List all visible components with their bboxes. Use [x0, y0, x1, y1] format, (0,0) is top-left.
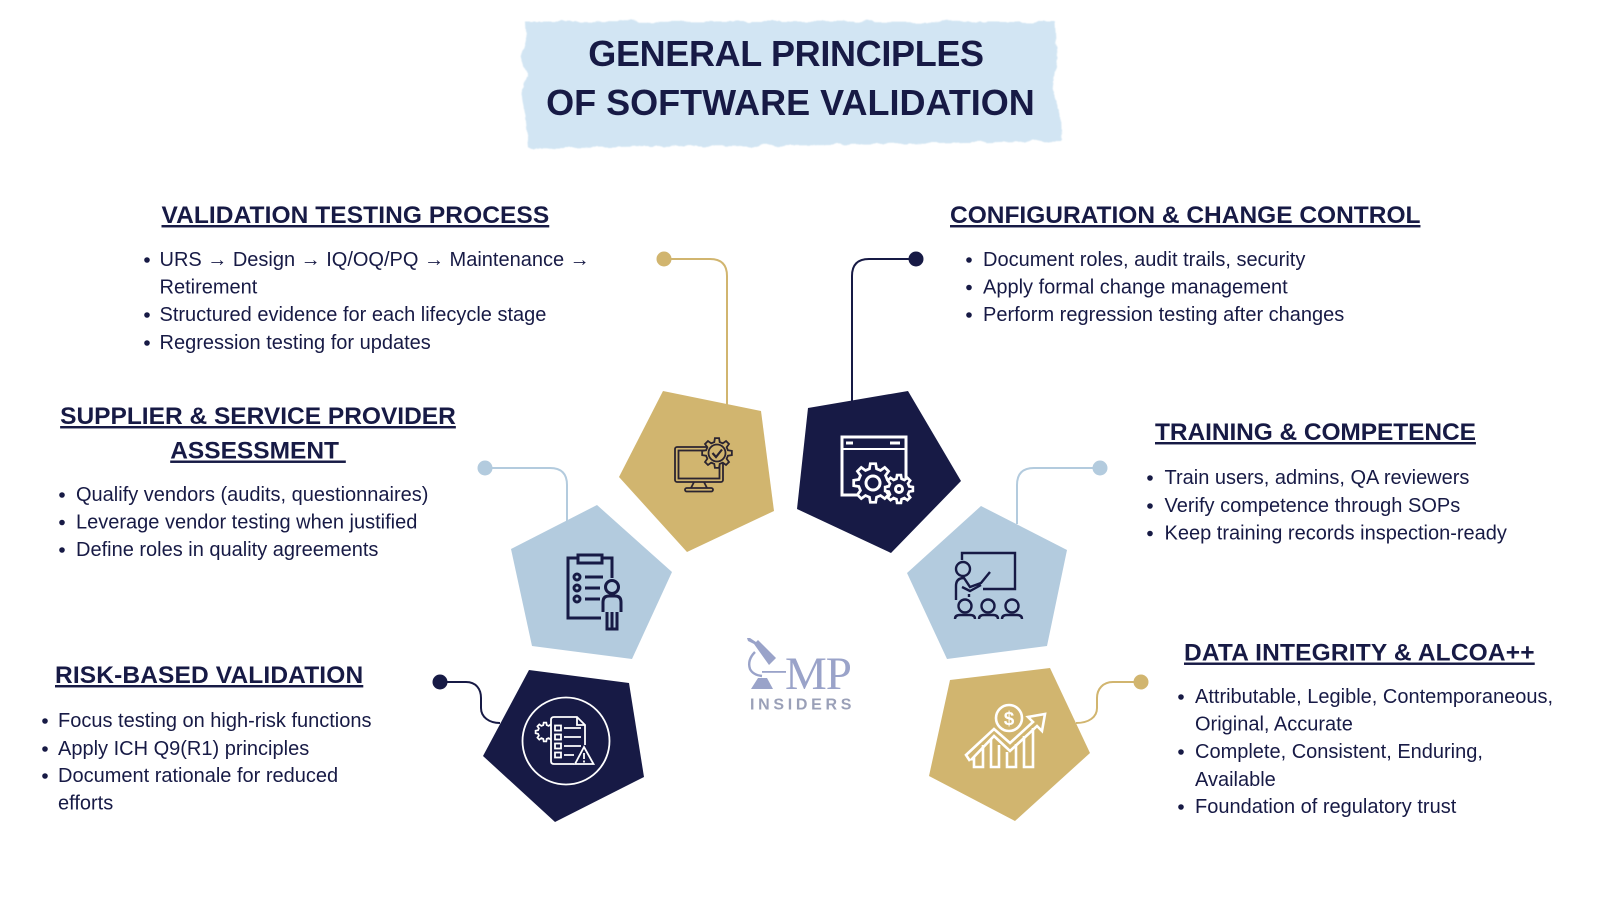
- bullet list: Train users, admins, QA reviewers: [1164, 467, 1469, 489]
- bullet list: [966, 249, 1344, 326]
- bullet list: Verify competence through SOPs: [1164, 495, 1460, 517]
- connector: training: [1017, 460, 1108, 524]
- bullet list: Keep training records inspection-ready: [1164, 522, 1507, 544]
- icon: clipboard with person: [568, 555, 621, 629]
- bullet list: Define roles in quality agreements: [76, 539, 378, 561]
- heading: VALIDATION TESTING PROCESS: [162, 202, 549, 229]
- pentagon: risk: [483, 670, 644, 822]
- icon: dollar growth chart: $: [1004, 709, 1015, 730]
- icon: monitor with check gear: [675, 438, 732, 492]
- bullet list: Complete, Consistent, Enduring,: [1195, 741, 1483, 763]
- bullet list: Retirement: [160, 276, 258, 298]
- panel: validation testing process: [144, 202, 590, 354]
- bullet list: [144, 249, 590, 354]
- connector: supplier: [478, 460, 567, 522]
- pentagon: validation testing: [619, 391, 774, 552]
- bullet list: [59, 484, 428, 561]
- icon: circled document with warning: [522, 698, 610, 784]
- heading: DATA INTEGRITY & ALCOA++: [1184, 640, 1535, 666]
- microscope mark: [747, 638, 786, 689]
- bullet list: [1178, 686, 1553, 818]
- panel: training and competence: [1147, 419, 1507, 544]
- bullet list: Available: [1195, 769, 1276, 791]
- torn paper background: [521, 21, 1062, 148]
- icon: trainer with audience: [955, 553, 1022, 619]
- bullet list: URS → Design → IQ/OQ/PQ → Maintenance →: [160, 249, 590, 271]
- bullet list: Structured evidence for each lifecycle stage: [160, 304, 546, 326]
- heading: SUPPLIER & SERVICE PROVIDER: [60, 403, 456, 430]
- bullet list: Leverage vendor testing when justified: [76, 512, 417, 534]
- bullet list: Regression testing for updates: [160, 332, 431, 354]
- title text: [546, 33, 1035, 123]
- icon: window with gears: [842, 437, 913, 503]
- heading: TRAINING & COMPETENCE: [1155, 419, 1476, 446]
- logo letters MP: MP: [785, 648, 851, 700]
- bullet list: [1147, 467, 1507, 544]
- bullet list: Document rationale for reduced: [58, 765, 338, 787]
- connector: risk: [432, 674, 500, 723]
- icon: dollar growth chart: [966, 705, 1045, 767]
- title text: GENERAL PRINCIPLES: [588, 33, 984, 74]
- bullet list: efforts: [58, 792, 113, 814]
- heading: [60, 403, 456, 464]
- panel: configuration and change control: [950, 202, 1420, 326]
- bullet list: Focus testing on high-risk functions: [58, 710, 372, 732]
- pentagon: supplier: [511, 505, 672, 659]
- title banner: [521, 21, 1062, 148]
- bullet list: Apply formal change management: [983, 276, 1288, 298]
- bullet list: [42, 710, 371, 814]
- heading: RISK-BASED VALIDATION: [55, 662, 363, 689]
- panel: data integrity and alcoa: [1178, 640, 1553, 818]
- panel: supplier and service provider assessment: [59, 403, 456, 561]
- logo word INSIDERS: INSIDERS: [750, 696, 855, 714]
- bullet list: Foundation of regulatory trust: [1195, 796, 1457, 818]
- bullet list: Qualify vendors (audits, questionnaires): [76, 484, 428, 506]
- connector: configuration: [852, 252, 924, 402]
- bullet list: Document roles, audit trails, security: [983, 249, 1305, 271]
- bullet list: Apply ICH Q9(R1) principles: [58, 738, 309, 760]
- bullet list: Attributable, Legible, Contemporaneous,: [1195, 686, 1553, 708]
- connector: validation testing: [656, 252, 727, 405]
- heading: CONFIGURATION & CHANGE CONTROL: [950, 202, 1420, 229]
- panel: risk-based validation: [42, 662, 371, 814]
- bullet list: Original, Accurate: [1195, 714, 1353, 736]
- pentagon: configuration: [797, 391, 961, 553]
- pentagon: data integrity: [929, 668, 1090, 821]
- connector: data integrity: [1076, 674, 1148, 723]
- pentagon: training: [907, 506, 1067, 659]
- heading: ASSESSMENT: [170, 438, 346, 464]
- bullet list: Perform regression testing after changes: [983, 304, 1344, 326]
- logo: GMP Insiders: [747, 638, 855, 714]
- title text: OF SOFTWARE VALIDATION: [546, 82, 1035, 123]
